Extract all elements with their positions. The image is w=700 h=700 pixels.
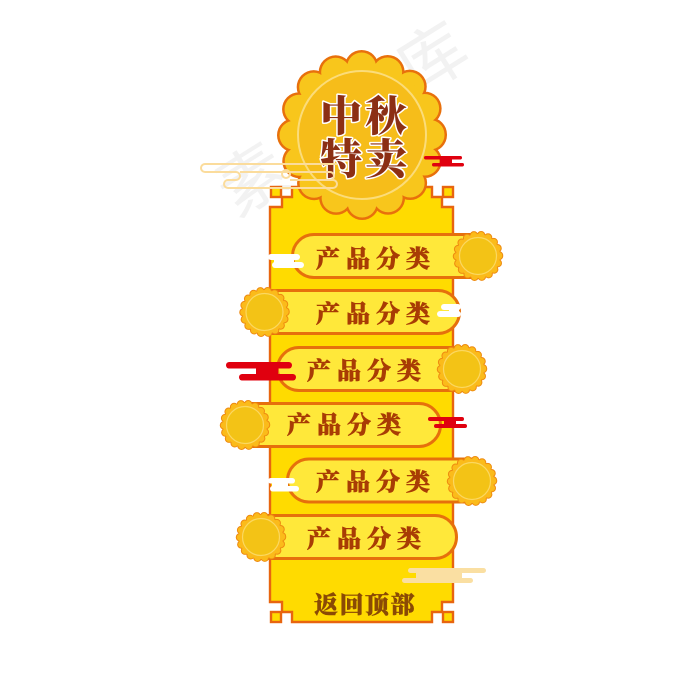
menu item 3: 产品分类 (307, 357, 427, 385)
menu item 2: 产品分类 (316, 300, 436, 328)
icon: small mooncake 3 (440, 347, 484, 391)
menu item 1: 产品分类 (316, 245, 436, 273)
icon: small mooncake 2 (242, 290, 286, 334)
heading: mooncake badge: 卖 (365, 137, 408, 184)
icon: small mooncake 1 (456, 234, 500, 278)
decoration: white cloud item 1 (268, 254, 304, 268)
decoration: cream cloud bottom (402, 568, 486, 583)
decoration: outlined cream cloud (201, 164, 337, 188)
decoration: white cloud item 5 (268, 478, 299, 492)
menu item 4 (245, 404, 440, 446)
heading: mooncake badge: 特 (320, 137, 362, 184)
heading: mooncake badge (290, 63, 434, 207)
decoration: small red cloud top (424, 156, 464, 166)
panel: yellow scroll background (270, 187, 453, 622)
icon: small mooncake 4 (223, 403, 267, 447)
icon: small mooncake 6 (239, 515, 283, 559)
watermark: 素 (204, 130, 302, 231)
menu item 5: 产品分类 (316, 468, 436, 496)
menu item 5 (288, 459, 472, 502)
menu item 6 (261, 516, 456, 558)
menu item 1 (292, 234, 480, 278)
decoration: white cloud item 2 (437, 304, 461, 317)
menu item 3 (278, 348, 462, 390)
menu item 4: 产品分类 (287, 411, 407, 439)
heading: mooncake badge: 中 (320, 94, 362, 141)
menu item 6: 产品分类 (307, 525, 427, 553)
decoration: large red cloud (226, 362, 296, 380)
decoration: small red cloud item 4 (428, 417, 467, 428)
icon: small mooncake 5 (450, 459, 494, 503)
heading: mooncake badge: 秋 (365, 94, 407, 141)
back to top label: 返回顶部 (314, 591, 416, 619)
watermark (204, 9, 482, 231)
watermark: 库 (384, 9, 482, 110)
menu item 2 (264, 290, 460, 334)
